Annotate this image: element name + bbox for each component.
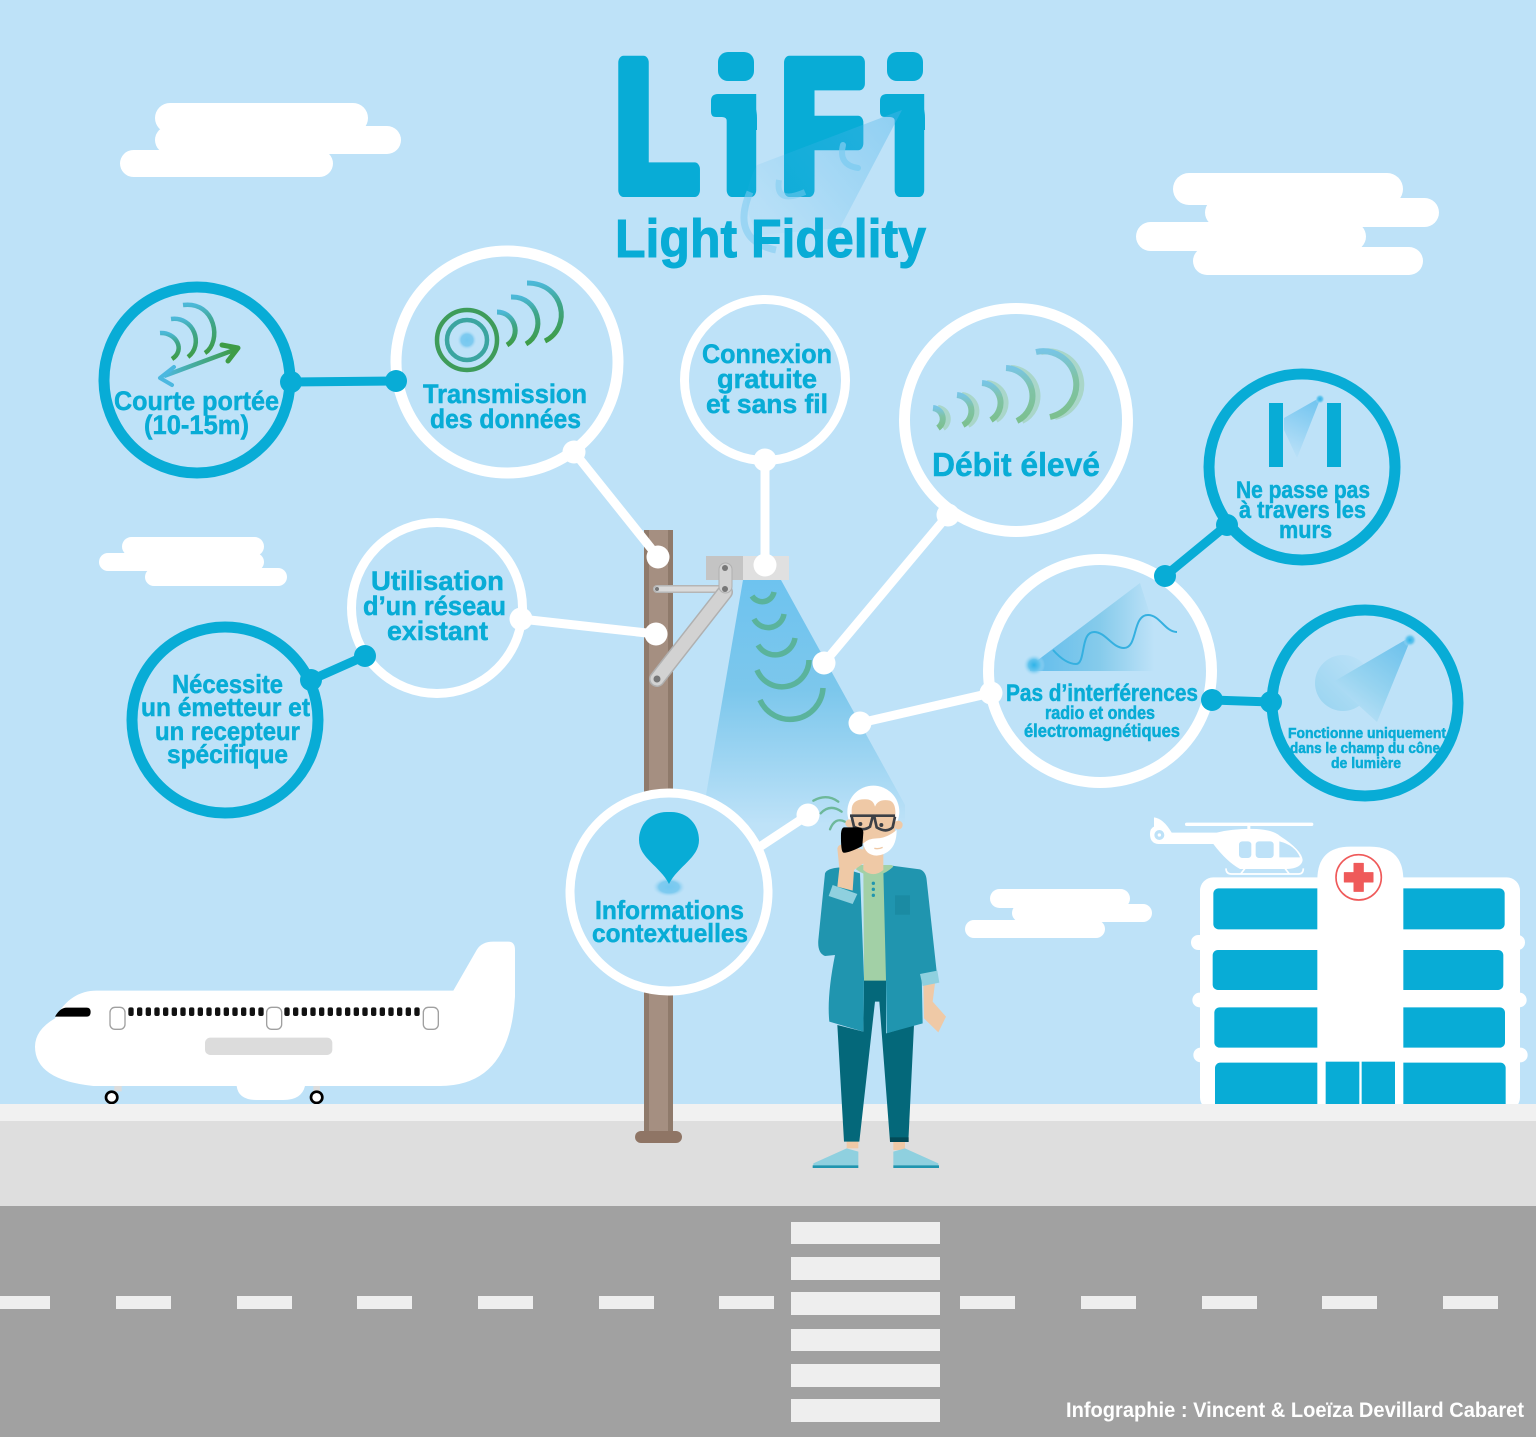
panel: Fonctionne uniquement dans le champ du cône	[1272, 610, 1458, 796]
panel: Débit élevé: Débit élevé	[932, 446, 1100, 483]
panel: Utilisation d'un réseau existant: d’un réseau	[363, 591, 506, 621]
panel: Ne passe pas à travers les murs	[1209, 374, 1395, 560]
pavement	[0, 1104, 1536, 1206]
panel: Transmission des données	[396, 251, 618, 473]
panel: Débit élevé	[904, 308, 1128, 532]
panel: Ne passe pas à travers les murs: murs	[1279, 517, 1332, 544]
panel: Transmission des données: Transmission	[423, 379, 587, 409]
panel: Nécessite un émetteur et un recepteur spécifique: Nécessite	[172, 669, 283, 699]
panel: Fonctionne uniquement dans le champ du cône: Fonctionne uniquement	[1288, 725, 1446, 742]
subtitle: Light Fidelity: Light Fidelity	[615, 209, 926, 269]
lamp head and arm	[654, 556, 789, 682]
lamp post	[635, 530, 682, 1143]
person with phone	[813, 786, 946, 1168]
panel: Courte portée	[104, 287, 290, 473]
panel: Connexion gratuite et sans fil: gratuite	[717, 364, 817, 394]
panel: Utilisation d'un réseau existant	[352, 522, 532, 694]
cloud: middle left	[99, 537, 287, 586]
panel: Connexion gratuite et sans fil: et sans fil	[706, 389, 828, 419]
pedestrian crossing	[791, 1222, 940, 1422]
panel: Pas d'interférences: radio et ondes	[1045, 703, 1155, 723]
title decoration: light cone	[744, 110, 902, 250]
panel: Pas d'interférences	[980, 560, 1212, 782]
panel: Ne passe pas à travers les murs: à travers les	[1239, 497, 1366, 524]
light cone	[700, 580, 905, 830]
panel: Fonctionne uniquement dans le champ du cône: de lumière	[1331, 755, 1401, 772]
credit line: Infographie : Vincent & Loeïza Devillard Cabaret	[1066, 1399, 1524, 1422]
panel: Courte portée: (10-15m)	[144, 410, 249, 440]
title: LiFi: LiFi	[614, 23, 929, 230]
cloud: top left	[120, 103, 401, 177]
panel: Informations contextuelles: Informations	[595, 895, 744, 925]
hospital	[1191, 847, 1528, 1117]
panel: Nécessite un émetteur et un recepteur spécifique	[132, 627, 318, 813]
panel: Nécessite un émetteur et un recepteur spécifique: un émetteur et	[141, 692, 310, 722]
waves in the light cone	[752, 592, 823, 719]
panel: Transmission des données: des données	[430, 404, 581, 434]
cloud: middle right	[965, 889, 1152, 938]
panel: Nécessite un émetteur et un recepteur spécifique: spécifique	[167, 739, 288, 769]
white connectors	[521, 452, 991, 850]
panel: Informations contextuelles: contextuelles	[592, 918, 748, 948]
airplane	[35, 942, 515, 1103]
panel: Nécessite un émetteur et un recepteur spécifique: un recepteur	[155, 716, 300, 746]
panel: Pas d'interférences: électromagnétiques	[1024, 721, 1180, 741]
helicopter	[1150, 817, 1313, 874]
panel: Utilisation d'un réseau existant: existant	[387, 616, 488, 646]
panel: Courte portée: Courte portée	[114, 386, 279, 416]
blue connectors	[280, 370, 1282, 713]
panel: Connexion gratuite et sans fil	[684, 300, 846, 472]
road	[0, 1206, 1536, 1437]
panel: Pas d'interférences: Pas d’interférences	[1006, 680, 1198, 707]
road centre dashes	[0, 1296, 1498, 1309]
panel: Utilisation d'un réseau existant: Utilisation	[371, 566, 504, 596]
cloud: top right	[1136, 173, 1439, 275]
panel: Fonctionne uniquement dans le champ du cône: dans le champ du cône	[1290, 740, 1440, 757]
panel: Connexion gratuite et sans fil: Connexion	[702, 339, 832, 369]
panel: Ne passe pas à travers les murs: Ne passe pas	[1236, 477, 1370, 504]
panel: Informations contextuelles	[570, 793, 768, 991]
